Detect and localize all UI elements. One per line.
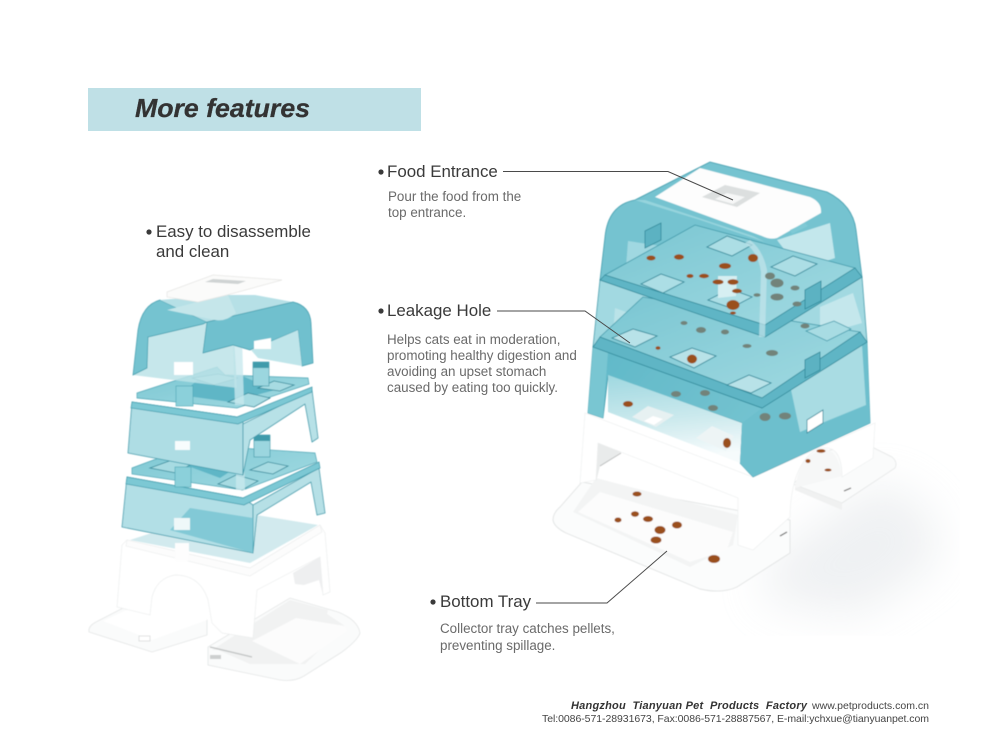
white base housing: [580, 413, 875, 550]
factory contact footer: Tel:0086-571-28931673, Fax:0086-571-28887567, E-mail:ychxue@tianyuanpet.com: [542, 713, 929, 725]
callout: easy to disassemble: Easy to disassemble: [156, 222, 311, 241]
callout: food entrance: [378, 162, 521, 220]
blue tier 1 assembled dome: [600, 162, 862, 337]
white lid: [167, 275, 282, 302]
exploded product view: [89, 275, 360, 680]
callout: bottom tray: [430, 592, 615, 653]
callout: food entrance: Food Entrance: [387, 162, 498, 181]
callout: leakage hole: Leakage Hole: [387, 301, 491, 320]
front tray: [553, 478, 790, 591]
callout: bottom tray: preventing spillage.: [440, 638, 555, 653]
callout: leakage hole: caused by eating too quickly.: [387, 380, 558, 395]
heading banner: [88, 88, 421, 131]
blue tier 3 assembled: [588, 342, 870, 477]
callout: food entrance: top entrance.: [388, 205, 466, 220]
kibble pieces: [614, 254, 832, 563]
callout: bottom tray: Collector tray catches pellets,: [440, 621, 615, 636]
base tray pieces: [89, 598, 360, 680]
callout: leakage hole: avoiding an upset stomach: [387, 364, 546, 379]
blue tier 1 dome: [133, 295, 313, 388]
leader line: bottom tray: [536, 551, 667, 603]
leader line: leakage hole: [497, 311, 630, 343]
floor shadow: [760, 480, 940, 615]
back tray section: [793, 445, 896, 510]
assembled product view: [553, 162, 940, 615]
title: More features: [135, 93, 310, 123]
callout: easy to disassemble: [146, 222, 311, 261]
factory contact footer: www.petproducts.com.cn: [811, 700, 929, 712]
blue tier 3: [122, 425, 325, 553]
callout: bottom tray: Bottom Tray: [440, 592, 532, 611]
callout: leakage hole: Helps cats eat in moderation,: [387, 332, 560, 347]
callout: leakage hole: [378, 301, 577, 395]
callout: food entrance: Pour the food from the: [388, 189, 521, 204]
white lid assembled: [655, 168, 821, 239]
leader line: food entrance: [503, 172, 733, 200]
callout: leakage hole: promoting healthy digestion and: [387, 348, 577, 363]
factory contact footer: [542, 700, 929, 725]
callout: easy to disassemble: and clean: [156, 242, 229, 261]
blue tier 2 assembled: [593, 277, 867, 408]
white base: [117, 512, 330, 638]
blue tier 2: [128, 337, 318, 475]
factory contact footer: Hangzhou Tianyuan Pet Products Factory: [571, 700, 808, 712]
